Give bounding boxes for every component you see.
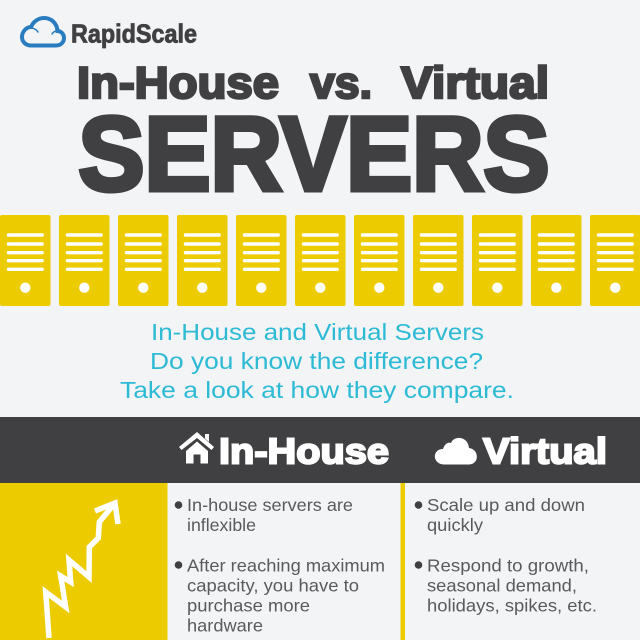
bullet: scale quickly: quickly (427, 515, 483, 535)
column divider (400, 483, 405, 640)
logo: RapidScale (22, 18, 197, 48)
header band (0, 417, 640, 483)
title line: In-House vs. Virtual: vs. (310, 59, 372, 108)
bullet: inflexible: inflexible (187, 515, 256, 535)
icon: house (179, 432, 214, 464)
intro text: In-House and Virtual Servers (151, 319, 484, 345)
bullet: inflexible: In-house servers are (187, 495, 353, 515)
icon: cloud (435, 438, 477, 464)
panel: Virtual list (415, 495, 597, 616)
bullet: respond to growth: Respond to growth, (427, 556, 589, 576)
intro text: Take a look at how they compare. (120, 377, 514, 403)
panel: scalability icon (0, 483, 168, 640)
logo wordmark: RapidScale (71, 18, 197, 48)
bullet: inflexible (175, 495, 353, 535)
column heading: In-House: In-House (219, 431, 389, 471)
intro text: Do you know the difference? (150, 348, 483, 374)
bullet: scale quickly: Scale up and down (427, 495, 585, 515)
column heading: Virtual: Virtual (483, 431, 607, 471)
bullet: respond to growth: seasonal demand, (427, 576, 577, 596)
title (77, 59, 550, 213)
bullet: purchase hardware: After reaching maximum (187, 556, 385, 576)
title line: In-House vs. Virtual: Virtual (401, 59, 549, 108)
title line: SERVERS: SERVERS (78, 96, 550, 213)
icon: blue cloud (22, 18, 64, 46)
title line: In-House vs. Virtual (77, 59, 549, 108)
panel: In-House list (175, 495, 385, 636)
title line: In-House vs. Virtual: In-House (77, 59, 279, 108)
bullet: scale quickly (415, 495, 585, 535)
icon: rising arrow (46, 503, 118, 638)
bullet: purchase hardware: capacity, you have to (187, 576, 359, 596)
bullet: purchase hardware (175, 556, 385, 636)
bullet: purchase hardware: purchase more (187, 596, 310, 616)
server row icons (0, 215, 640, 306)
bullet: respond to growth (415, 556, 597, 616)
intro text (120, 319, 514, 403)
bullet: purchase hardware: hardware (187, 616, 263, 636)
bullet: respond to growth: holidays, spikes, etc. (427, 596, 597, 616)
